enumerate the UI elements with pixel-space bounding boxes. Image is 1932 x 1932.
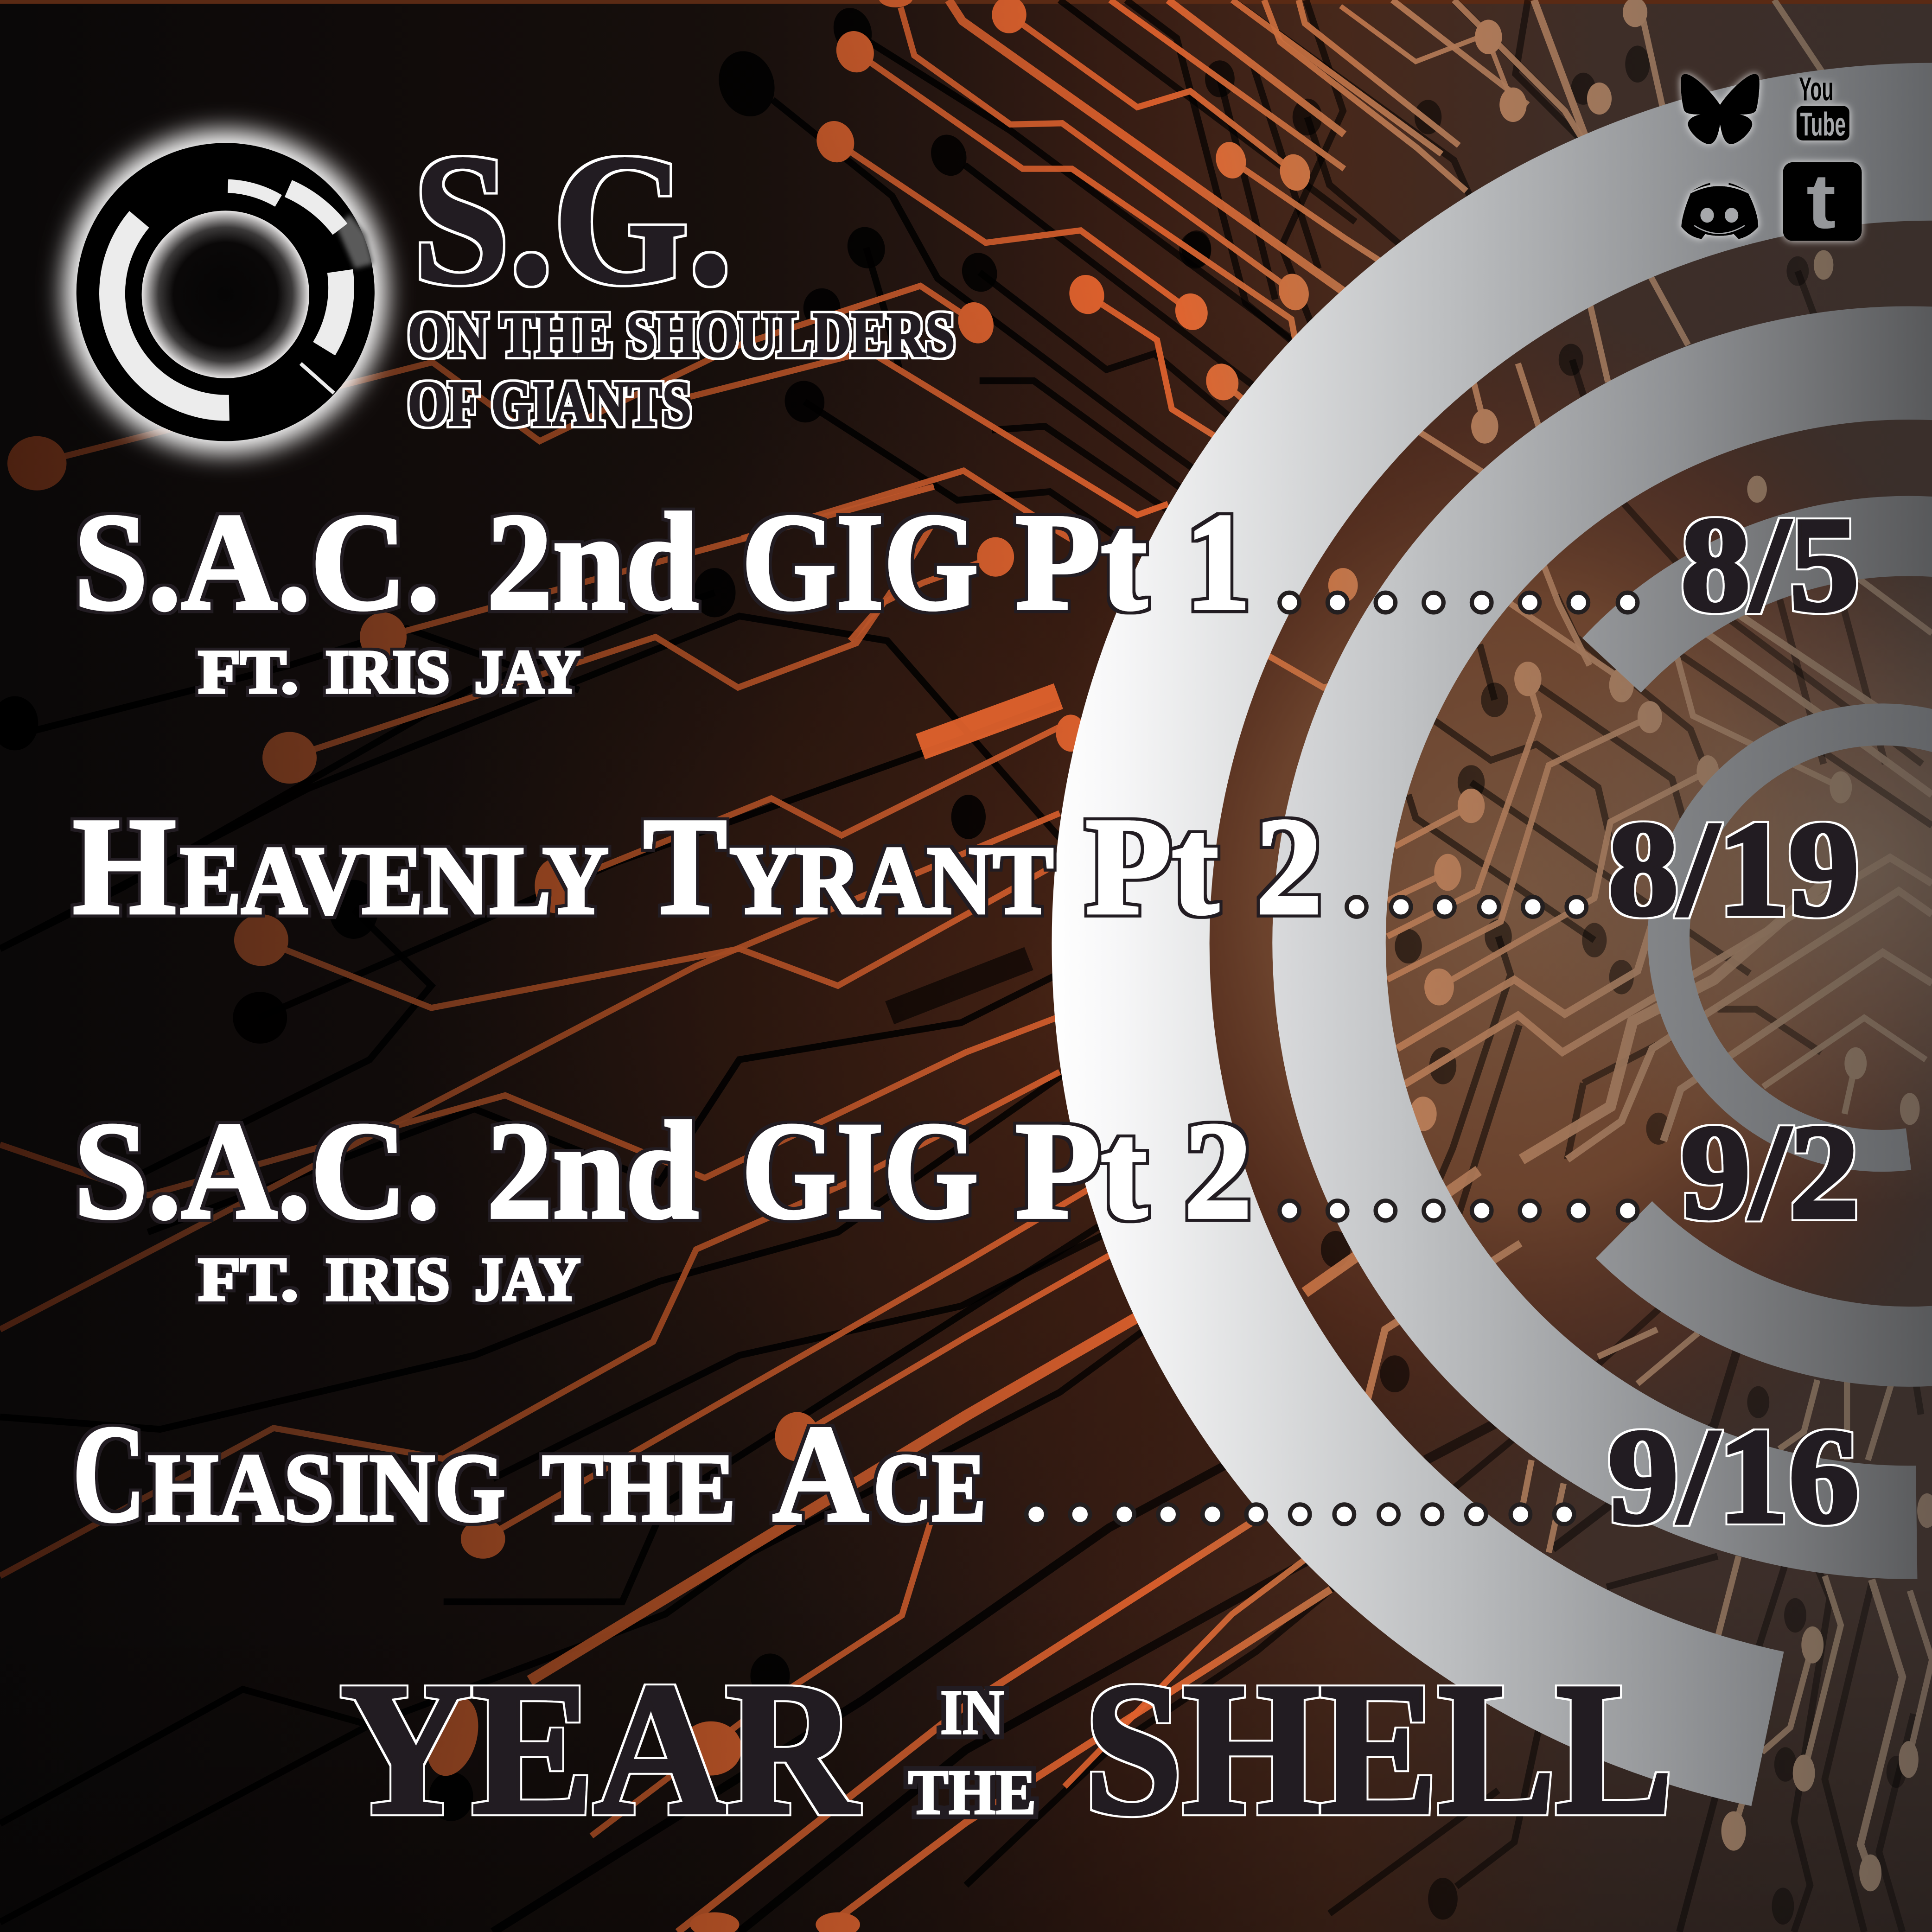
row: Heavenly Tyrant Pt 2: Pt [1085, 789, 1220, 943]
icon: youtube [1797, 71, 1849, 143]
dark bar [890, 959, 1029, 1013]
featuring: Iris Jay 2: JAY [474, 1245, 580, 1314]
row: S.A.C. 2nd GIG Pt 2 [74, 1093, 1859, 1248]
date: 9/2 [1681, 1097, 1859, 1247]
row: S.A.C. 2nd GIG Pt 1 [74, 485, 1859, 639]
row: S.A.C. 2nd GIG Pt 1: Pt [1015, 485, 1148, 639]
row: S.A.C. 2nd GIG Pt 2: 2nd [487, 1093, 699, 1248]
title: Year in the Shell: THE [908, 1757, 1036, 1828]
dots [1280, 1201, 1638, 1220]
row: S.A.C. 2nd GIG Pt 2: 2 [1184, 1093, 1252, 1248]
row: S.A.C. 2nd GIG Pt 2: GIG [742, 1093, 978, 1248]
row: S.A.C. 2nd GIG Pt 1: S.A.C. [74, 485, 440, 639]
row: Heavenly Tyrant Pt 2: EAVENLY [180, 827, 609, 934]
row: Chasing the Ace: HASING [148, 1434, 505, 1542]
logo [64, 131, 387, 453]
logo disc [77, 143, 375, 441]
dots [1280, 593, 1638, 612]
orange bar [920, 696, 1058, 746]
row: Chasing the Ace: CE [874, 1434, 986, 1542]
date: 8/19 [1608, 794, 1859, 944]
featuring: Iris Jay 2: IRIS [325, 1245, 450, 1314]
dots [1347, 897, 1587, 917]
ring: third lower [1624, 1230, 1932, 1347]
title: Year in the Shell [340, 1643, 1673, 1854]
ring: inner [1669, 725, 1932, 1151]
logo segments [112, 186, 341, 408]
row: Chasing the Ace [73, 1396, 1859, 1551]
heading: on the shoulders: ON THE SHOULDERS [408, 299, 955, 370]
icon: discord [1681, 183, 1758, 239]
logo hole [142, 210, 309, 378]
heading: of giants: OF GIANTS [408, 368, 691, 439]
icon: tumblr: t [1806, 158, 1836, 245]
logo glow [64, 131, 387, 453]
icon: youtube: Tube [1800, 106, 1846, 143]
title: Year in the Shell: YEAR [340, 1643, 860, 1854]
dots [1027, 1505, 1574, 1524]
social icons [1681, 71, 1862, 245]
row: Heavenly Tyrant Pt 2 [73, 789, 1859, 944]
title: Year in the Shell: SHELL [1084, 1643, 1673, 1854]
row: S.A.C. 2nd GIG Pt 1: 2nd [487, 485, 699, 639]
featuring: Iris Jay 1 [198, 638, 580, 706]
shell rings [1131, 142, 1932, 1729]
row: Heavenly Tyrant Pt 2: 2 [1256, 789, 1322, 943]
ring: outer [1131, 142, 1932, 1729]
date: 9/16 [1608, 1402, 1859, 1551]
row: Heavenly Tyrant Pt 2: YRANT [729, 827, 1053, 934]
date: 8/5 [1681, 490, 1859, 639]
featuring: Iris Jay 1: IRIS [325, 638, 450, 706]
row: S.A.C. 2nd GIG Pt 2: S.A.C. [74, 1093, 440, 1248]
row: Chasing the Ace: C [73, 1396, 146, 1550]
row: S.A.C. 2nd GIG Pt 2: Pt [1015, 1093, 1148, 1248]
row: Chasing the Ace: THE [542, 1434, 736, 1542]
ring: second [1329, 363, 1932, 1522]
featuring: Iris Jay 2 [198, 1245, 580, 1314]
icon: youtube: You [1799, 71, 1833, 108]
icon: butterfly [1681, 74, 1760, 144]
row: S.A.C. 2nd GIG Pt 1: GIG [742, 485, 978, 639]
title: Year in the Shell: IN [940, 1677, 1004, 1747]
featuring: Iris Jay 1: JAY [474, 638, 580, 706]
row: Heavenly Tyrant Pt 2: T [643, 789, 727, 943]
logo notch [337, 214, 373, 268]
ring: third upper [1612, 536, 1932, 665]
row: Heavenly Tyrant Pt 2: H [73, 789, 176, 943]
row: S.A.C. 2nd GIG Pt 1: 1 [1186, 485, 1250, 639]
row: Chasing the Ace: A [772, 1396, 869, 1550]
featuring: Iris Jay 1: FT. [198, 638, 298, 706]
icon: tumblr [1783, 158, 1862, 245]
featuring: Iris Jay 2: FT. [198, 1245, 298, 1314]
heading: S.G.: S.G. [413, 116, 732, 323]
